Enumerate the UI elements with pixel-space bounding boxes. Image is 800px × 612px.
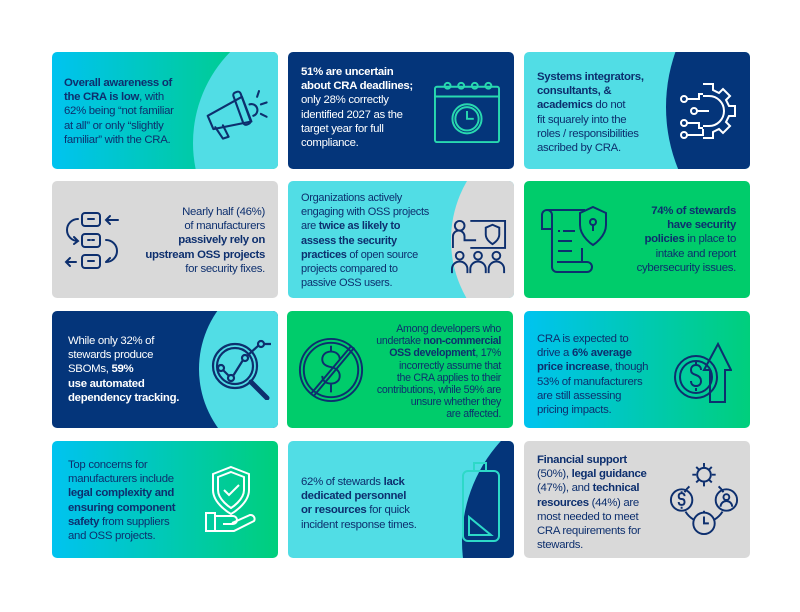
- text: passively rely: upstream OSS projects: [145, 249, 265, 261]
- text: deadlines: compliance.: [301, 137, 358, 149]
- text: support needed: [537, 454, 647, 551]
- icon: magnifier chart: [212, 340, 271, 400]
- text: actively engaging: assess the security: [301, 235, 397, 247]
- text: support needed: Financial support: [537, 454, 627, 466]
- text: integrators: [537, 71, 644, 154]
- icon: low battery: [462, 462, 500, 542]
- text: SBOMs: While only 32% of: [68, 335, 154, 347]
- text: price increase: CRA is expected to: [537, 333, 628, 345]
- text: non-commercial: are affected.: [446, 408, 501, 420]
- text: actively engaging: Organizations actively: [301, 192, 402, 204]
- card 8: non-commercial: [287, 311, 513, 428]
- text: integrators: ascribed by CRA.: [537, 142, 621, 154]
- text: personnel: or resources for quick: [301, 504, 410, 516]
- text: actively engaging: engaging with OSS projects: [301, 206, 429, 218]
- text: deadlines: only 28% correctly: [301, 94, 389, 106]
- text: personnel: dedicated personnel: [301, 490, 406, 502]
- card 2: deadlines: [288, 52, 514, 169]
- text: non-commercial: the CRA applies to their: [397, 372, 501, 384]
- text: passively rely: for security fixes.: [185, 263, 265, 275]
- text: actively engaging: projects compared to: [301, 263, 398, 275]
- icon: presentation: [451, 220, 506, 274]
- text: deadlines: 51% are uncertain: [301, 66, 393, 78]
- text: passively rely: Nearly half (46%): [182, 206, 265, 218]
- card 4: passively rely: [52, 181, 278, 298]
- card 12: support needed: [524, 441, 750, 558]
- text: support needed: CRA requirements for: [537, 525, 641, 537]
- card 11: personnel: [288, 441, 514, 558]
- text: deadlines: target year for full: [301, 123, 384, 135]
- text: SBOMs: dependency tracking.: [68, 392, 179, 404]
- text: passively rely: of manufacturers: [184, 220, 265, 232]
- icon: dollar arrow: [674, 342, 732, 403]
- text: personnel: [301, 476, 417, 531]
- text: security policies: cybersecurity issues.: [637, 262, 736, 274]
- card 9: price increase: [524, 311, 750, 428]
- text: support needed: resources (44%) are: [537, 497, 639, 509]
- text: awareness: at all” or only “slightly: [64, 120, 163, 132]
- text: price increase: drive a 6% average: [537, 347, 632, 359]
- icon: hand shield: [205, 466, 256, 532]
- text: non-commercial: Among developers who: [396, 323, 501, 335]
- text: SBOMs: [68, 335, 179, 404]
- text: support needed: stewards.: [537, 539, 583, 551]
- text: top concerns: manufacturers include: [68, 473, 174, 485]
- text: security policies: 74% of stewards: [651, 205, 736, 217]
- card 3: integrators: [524, 52, 750, 169]
- text: support needed: (50%), legal guidance: [537, 468, 647, 480]
- text: actively engaging: practices of open source: [301, 249, 418, 261]
- text: price increase: pricing impacts.: [537, 404, 611, 416]
- text: integrators: roles / responsibilities: [537, 128, 639, 140]
- text: non-commercial: OSS development, 17%: [389, 347, 501, 359]
- icon: no dollar: [298, 338, 364, 402]
- text: SBOMs: SBOMs, 59%: [68, 363, 133, 375]
- icon: calendar clock: [434, 82, 500, 143]
- text: awareness: Overall awareness of: [64, 77, 172, 89]
- text: top concerns: Top concerns for: [68, 459, 147, 471]
- text: top concerns: [68, 459, 176, 542]
- text: security policies: have security: [667, 219, 736, 231]
- text: top concerns: and OSS projects.: [68, 530, 155, 542]
- icon: stacked queue: [64, 212, 119, 269]
- text: integrators: fit squarely into the: [537, 114, 626, 126]
- text: personnel: incident response times.: [301, 519, 417, 531]
- icon: megaphone: [206, 90, 268, 140]
- text: awareness: familiar” with the CRA.: [64, 134, 170, 146]
- text: integrators: academics do not: [537, 99, 625, 111]
- text: awareness: the CRA is low, with: [64, 91, 164, 103]
- text: non-commercial: undertake non-commercial: [376, 335, 501, 347]
- text: deadlines: [301, 66, 413, 149]
- text: price increase: 53% of manufacturers: [537, 376, 642, 388]
- text: price increase: are still assessing: [537, 390, 621, 402]
- text: security policies: [637, 205, 736, 274]
- text: non-commercial: unsure whether they: [411, 396, 501, 408]
- text: integrators: consultants, &: [537, 85, 611, 97]
- icon: scroll with shield: [541, 206, 607, 273]
- card 10: top concerns: [52, 441, 278, 558]
- text: deadlines: about CRA deadlines;: [301, 80, 413, 92]
- text: support needed: (47%), and technical: [537, 482, 639, 494]
- text: SBOMs: stewards produce: [68, 349, 153, 361]
- text: passively rely: [145, 206, 265, 275]
- text: passively rely: passively rely on: [178, 234, 265, 246]
- text: awareness: [64, 77, 174, 146]
- text: top concerns: legal complexity and: [68, 487, 174, 499]
- text: personnel: 62% of stewards lack: [301, 476, 405, 488]
- icon: gear money people: [670, 463, 738, 535]
- text: non-commercial: incorrectly assume that: [399, 360, 501, 372]
- text: security policies: intake and report: [656, 248, 736, 260]
- text: non-commercial: [376, 323, 502, 420]
- text: price increase: price increase, though: [537, 361, 648, 373]
- text: non-commercial: contributions, while 59% are: [377, 384, 501, 396]
- card 7: SBOMs: [52, 311, 278, 428]
- text: price increase: [537, 333, 648, 416]
- text: actively engaging: passive OSS users.: [301, 277, 392, 289]
- text: SBOMs: use automated: [68, 378, 144, 390]
- card 1: awareness: [52, 52, 278, 169]
- text: integrators: Systems integrators,: [537, 71, 644, 83]
- text: top concerns: ensuring component: [68, 502, 175, 514]
- text: actively engaging: are twice as likely to: [301, 220, 400, 232]
- text: support needed: most needed to meet: [537, 511, 638, 523]
- text: top concerns: safety from suppliers: [68, 516, 169, 528]
- card 6: security policies: [524, 181, 750, 298]
- text: security policies: policies in place to: [644, 233, 736, 245]
- text: deadlines: identified 2027 as the: [301, 109, 403, 121]
- text: awareness: 62% being “not familiar: [64, 105, 174, 117]
- text: actively engaging: [301, 192, 429, 289]
- icon: gear circuit: [680, 83, 736, 139]
- card 5: actively engaging: [288, 181, 514, 298]
